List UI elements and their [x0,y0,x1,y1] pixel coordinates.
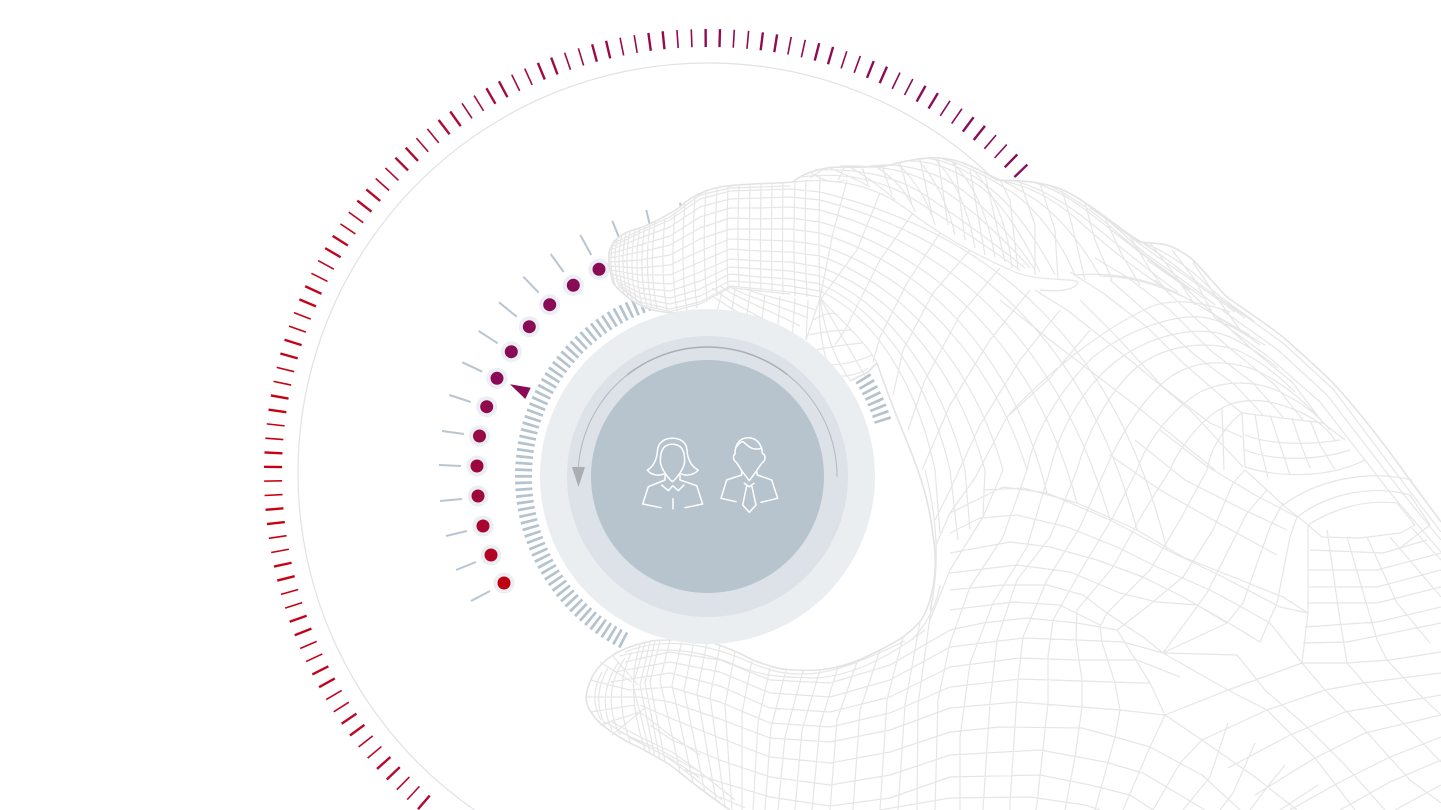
icon: woman [643,438,703,509]
palm mesh lower right [930,470,1441,810]
outer thin ring [298,63,1050,810]
rotation arrow [572,347,837,487]
hand silhouette fill [586,158,1441,810]
wireframe hand [586,158,1441,810]
palm mesh upper [820,180,1441,610]
hand outline [586,158,1441,810]
thumb mesh [586,585,950,810]
scale dots [466,259,610,594]
second finger and lower lobe mesh [712,286,877,380]
dial pointer [510,384,531,399]
outer red to purple tick ring [273,38,1024,808]
knuckle mesh [793,158,1265,345]
icon: man [721,438,778,512]
long gray scale ticks [439,203,684,601]
gray tick ring around dial [524,293,884,642]
index finger mesh [609,175,820,312]
outer disc [540,309,875,644]
dial disc [540,309,875,644]
middle disc [567,336,848,617]
inner disc [591,360,824,593]
